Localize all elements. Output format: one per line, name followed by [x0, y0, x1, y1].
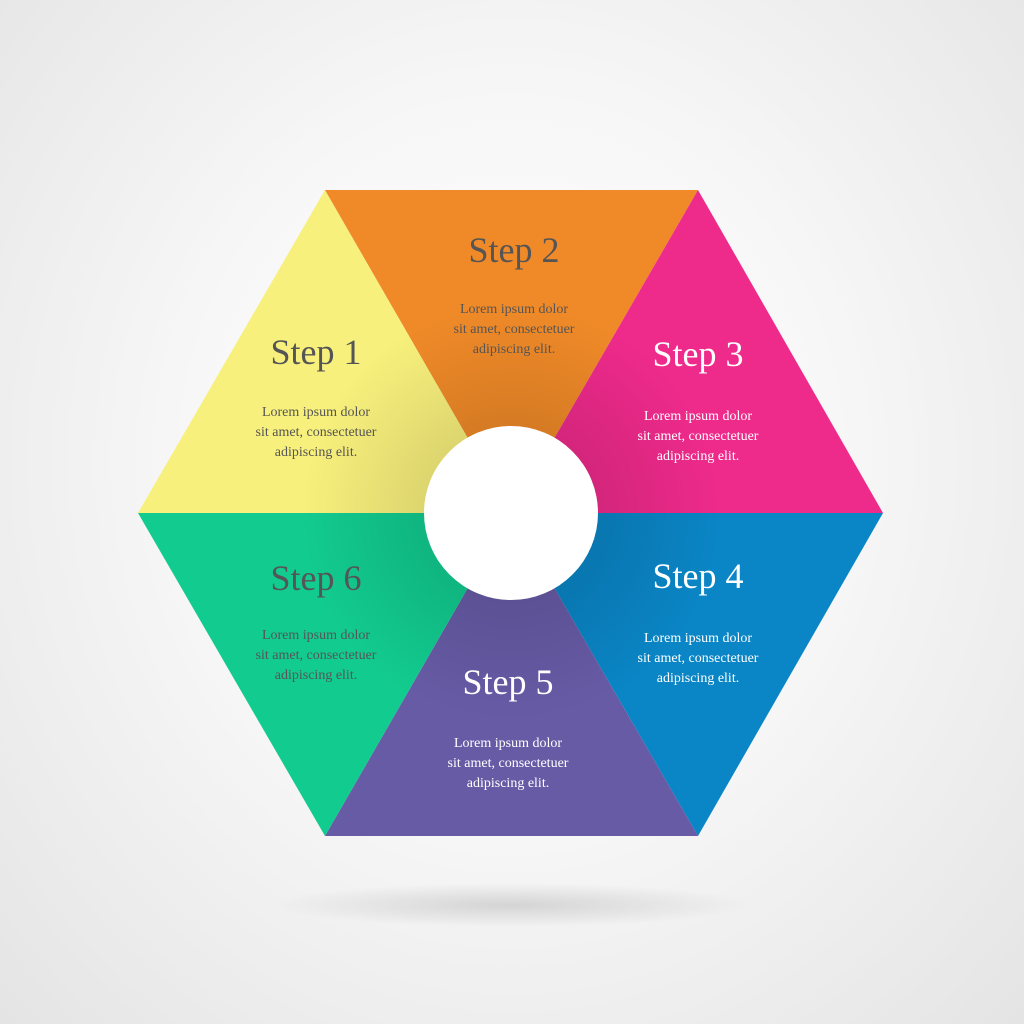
text: step 4: Step 4	[652, 556, 744, 596]
panel: step 3	[511, 190, 883, 513]
text: step 3: Step 3	[652, 334, 744, 374]
text: step 5	[448, 662, 569, 791]
text: step 1: sit amet, consectetuer	[256, 425, 377, 440]
text: step 3	[638, 334, 759, 464]
panel: step 6	[138, 513, 511, 836]
text: step 2: Step 2	[468, 230, 560, 270]
shadow	[271, 883, 751, 927]
text: step 3: adipiscing elit.	[657, 449, 739, 464]
text: step 6	[256, 558, 377, 683]
text: step 5: adipiscing elit.	[467, 776, 549, 791]
text: step 4: adipiscing elit.	[657, 671, 739, 686]
text: step 4: Lorem ipsum dolor	[644, 631, 752, 646]
panel: step 1	[138, 190, 511, 513]
text: step 1: adipiscing elit.	[275, 445, 357, 460]
text: step 6: Lorem ipsum dolor	[262, 628, 370, 643]
panel: step 4	[511, 513, 883, 836]
text: step 2: adipiscing elit.	[473, 342, 555, 357]
text: step 2: Lorem ipsum dolor	[460, 302, 568, 317]
text: step 6: adipiscing elit.	[275, 668, 357, 683]
text: step 1	[256, 332, 377, 460]
hexagon	[138, 190, 883, 836]
text: step 2	[454, 230, 575, 357]
text: step 3: Lorem ipsum dolor	[644, 409, 752, 424]
text: step 6: sit amet, consectetuer	[256, 648, 377, 663]
text: step 5: Lorem ipsum dolor	[454, 736, 562, 751]
panel: step 5	[325, 513, 698, 836]
center circle	[424, 426, 598, 600]
text: step 4	[638, 556, 759, 686]
text: step 5: Step 5	[462, 662, 554, 702]
text: step 2: sit amet, consectetuer	[454, 322, 575, 337]
text: step 5: sit amet, consectetuer	[448, 756, 569, 771]
text: step 1: Lorem ipsum dolor	[262, 405, 370, 420]
text: step 3: sit amet, consectetuer	[638, 429, 759, 444]
text: step 1: Step 1	[270, 332, 362, 372]
text: step 4: sit amet, consectetuer	[638, 651, 759, 666]
text: step 6: Step 6	[270, 558, 362, 598]
panel: step 2	[325, 190, 698, 513]
